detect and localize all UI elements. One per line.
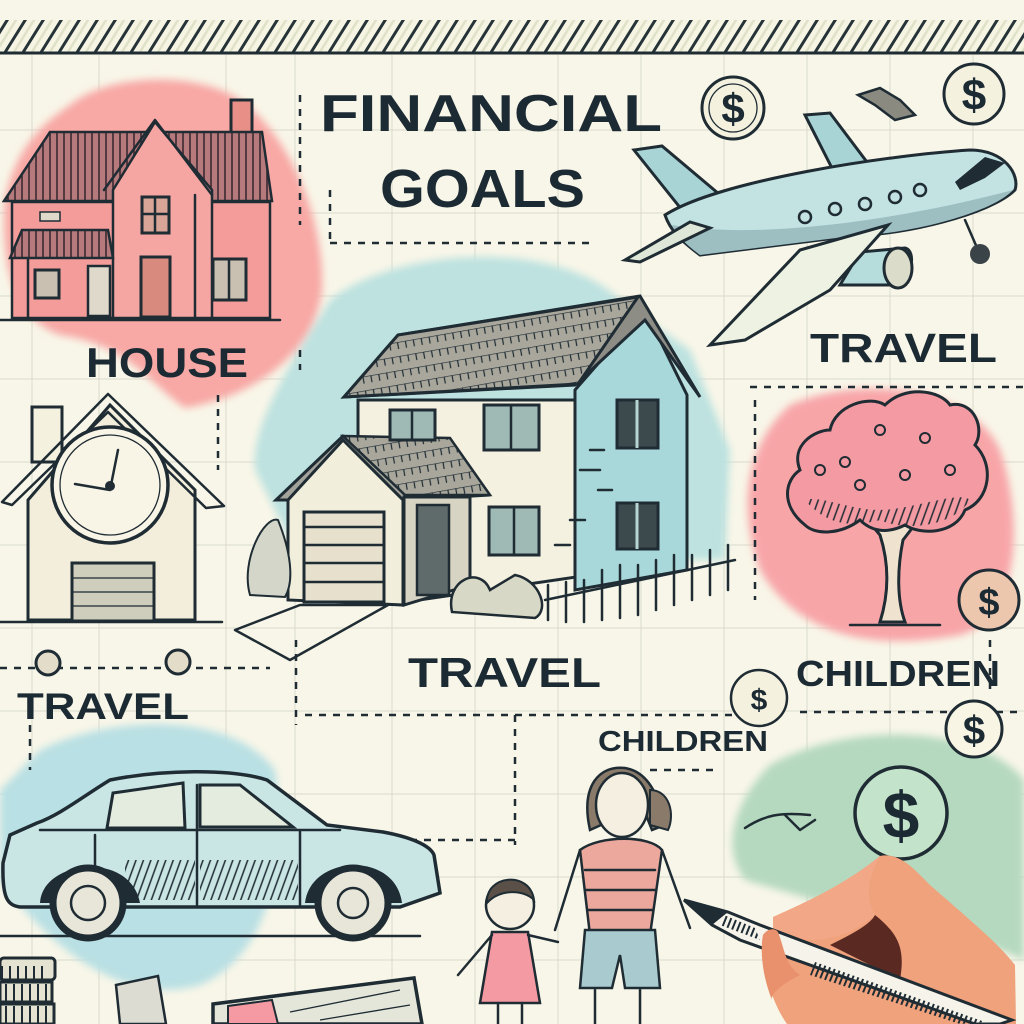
icon: top house (0, 100, 280, 320)
icon: clock house (0, 394, 224, 675)
icon: dollar coin top 2 (944, 64, 1004, 124)
title: GOALS (380, 159, 585, 219)
icon: coin right: $ (963, 709, 985, 753)
icon: child (458, 880, 558, 1024)
icon: coin right (946, 701, 1002, 757)
header stripe band (0, 20, 1024, 53)
icon: small coin (731, 670, 787, 726)
icon: coin stack (0, 958, 55, 1024)
icon: airplane (625, 113, 1016, 345)
icon: car (0, 772, 440, 938)
icon: large dollar coin: $ (883, 778, 919, 852)
icon: dollar coin top 2: $ (962, 71, 986, 120)
icon: banknote (116, 976, 422, 1024)
icon: large dollar coin (855, 767, 947, 859)
icon: tree (788, 392, 987, 625)
label: house: HOUSE (86, 339, 248, 386)
icon: dollar coin top 1 (702, 77, 764, 139)
label: travel left: TRAVEL (17, 686, 189, 727)
label: children right: CHILDREN (796, 653, 1000, 694)
dashed connector lines (0, 95, 1024, 845)
icon: dollar coin top 1: $ (721, 85, 745, 132)
title (320, 85, 662, 219)
icon: small doodle (858, 88, 915, 120)
label: travel right: TRAVEL (810, 325, 997, 371)
icon: coin near tree: $ (978, 582, 1000, 624)
icon: woman (555, 768, 690, 1024)
title: FINANCIAL (320, 85, 662, 143)
icon: green scribble (745, 814, 815, 830)
icon: small coin: $ (751, 684, 768, 717)
icon: hand holding pen (684, 855, 1016, 1024)
icon: center house (235, 296, 735, 660)
label: children center: CHILDREN (598, 726, 768, 758)
label: travel center: TRAVEL (408, 649, 601, 696)
icon: coin near tree (959, 570, 1019, 630)
